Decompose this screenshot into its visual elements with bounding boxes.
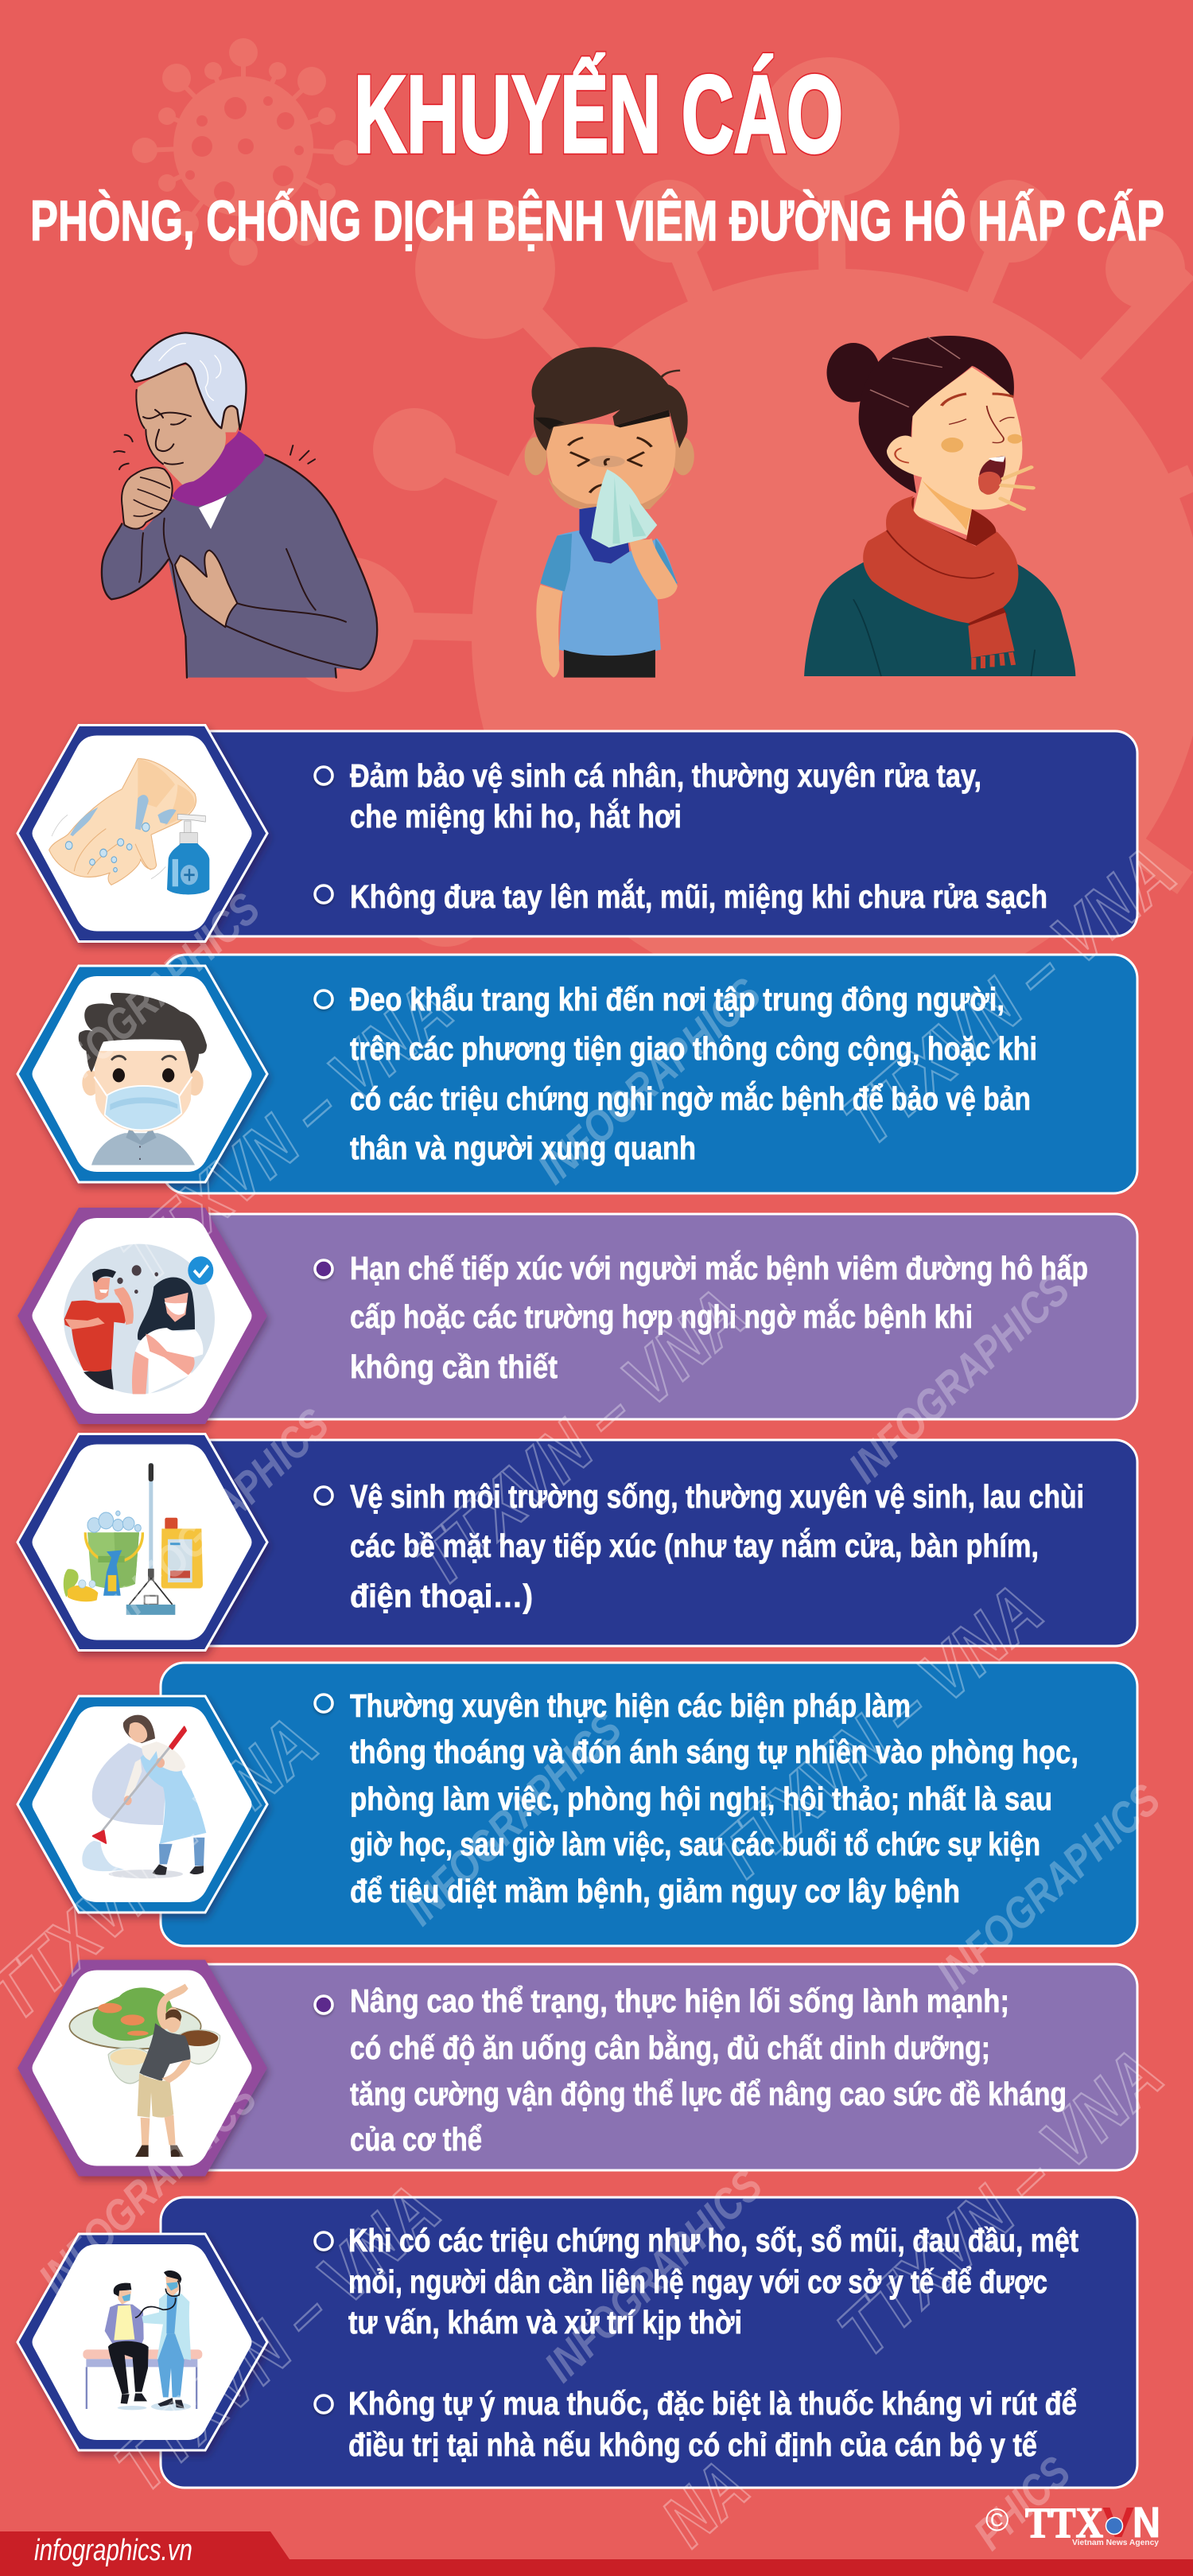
panel 4: cleaning	[17, 1434, 1137, 1650]
text: lifestyle recommendation: Nâng cao thể trạng, thực hiện lối sống lành mạnh;	[350, 1983, 1009, 2019]
bullet	[315, 2232, 332, 2250]
footer website: infographics.vn	[34, 2534, 192, 2567]
text: mask recommendation: Đeo khẩu trang khi đến nơi tập trung đông người,	[350, 981, 1005, 1018]
panel 2 background	[162, 955, 1137, 1193]
panel 2 hexagon	[17, 966, 267, 1182]
watermarks	[0, 831, 1191, 2562]
text: symptoms recommendation: tư vấn, khám và xử trí kịp thời	[348, 2304, 742, 2341]
panel 6 background	[183, 1964, 1137, 2170]
watermarks: TTXVN – VNA	[398, 1273, 761, 1603]
background virus: small	[132, 38, 359, 266]
watermarks: PHICS	[964, 2446, 1080, 2559]
watermarks: INFOGRAPHICS	[839, 1264, 1078, 1492]
bullet	[315, 1260, 332, 1278]
watermarks: TTXVN – VNA	[695, 1569, 1058, 1899]
text: mask recommendation: trên các phương tiện giao thông công cộng, hoặc khi	[350, 1030, 1037, 1067]
panel 1: hygiene	[17, 726, 1137, 942]
text: mask recommendation	[350, 981, 1037, 1166]
logo globe	[1106, 2517, 1123, 2535]
panel 4 hexagon	[17, 1434, 267, 1650]
watermarks: INFOGRAPHICS	[394, 1703, 631, 1935]
watermarks: INFOGRAPHICS	[102, 1399, 338, 1630]
bullet	[315, 990, 332, 1008]
text: cleaning recommendation: các bề mặt hay tiếp xúc (như tay nắm cửa, bàn phím,	[350, 1527, 1039, 1564]
logo tagline: Vietnam News Agency	[1072, 2538, 1159, 2547]
panel 7: seek medical care	[17, 2197, 1137, 2488]
watermarks: TTXVN – VNA	[105, 968, 468, 1298]
text: lifestyle recommendation	[350, 1983, 1067, 2158]
watermarks: INFOGRAPHICS	[535, 2160, 771, 2391]
panel 1 background	[183, 731, 1137, 936]
text: symptoms recommendation	[348, 2222, 1078, 2341]
text: contact recommendation	[350, 1250, 1088, 1385]
illustration: sneezing woman	[804, 336, 1075, 676]
panel 2: face masks	[17, 955, 1137, 1193]
illustration: coughing old man	[102, 333, 377, 678]
panel 7 hexagon	[17, 2234, 267, 2450]
text: cleaning recommendation: điện thoại…)	[350, 1578, 533, 1614]
text: ventilation recommendation	[350, 1687, 1078, 1909]
text: ventilation recommendation: phòng làm việc, phòng hội nghị, hội thảo; nhất là sau	[350, 1780, 1052, 1817]
panel 3 hexagon	[17, 1208, 267, 1424]
text: medication recommendation: điều trị tại nhà nếu không có chỉ định của cán bộ y tế	[348, 2426, 1037, 2463]
text: ventilation recommendation: để tiêu diệt mầm bệnh, giảm nguy cơ lây bệnh	[350, 1873, 960, 1909]
watermarks: INFOGRAPHICS	[29, 2072, 266, 2304]
background virus: large	[280, 57, 1193, 1004]
bullet	[315, 885, 332, 903]
panel 1 hexagon	[17, 726, 267, 942]
logo letter N: N	[1133, 2499, 1160, 2547]
icon: washing hands and sanitizer	[49, 759, 209, 894]
icon: woman mopping	[82, 1715, 206, 1878]
text: first recommendation: Đảm bảo vệ sinh cá nhân, thường xuyên rửa tay,	[350, 757, 981, 794]
text: lifestyle recommendation: có chế độ ăn uống cân bằng, đủ chất dinh dưỡng;	[350, 2029, 990, 2066]
panel 5 hexagon	[17, 1696, 267, 1913]
title	[354, 53, 843, 176]
panel 6: healthy lifestyle	[17, 1960, 1137, 2177]
panel 4 background	[183, 1440, 1137, 1646]
bullet	[315, 2395, 332, 2413]
text: lifestyle recommendation: của cơ thể	[350, 2121, 482, 2158]
footer band	[0, 2531, 1193, 2576]
bullet	[315, 1487, 332, 1504]
text: mask recommendation: có các triệu chứng nghi ngờ mắc bệnh để bảo vệ bản	[350, 1080, 1031, 1117]
text: medication recommendation: Không tự ý mua thuốc, đặc biệt là thuốc kháng vi rút để	[348, 2385, 1077, 2422]
watermarks: INFOGRAPHICS	[29, 883, 269, 1111]
text: cleaning recommendation	[350, 1478, 1084, 1614]
icon: man wearing mask	[79, 993, 207, 1165]
logo letters TTX: TTX	[1025, 2499, 1103, 2547]
icon: food and exercise	[69, 1984, 220, 2157]
text: ventilation recommendation: giờ học, sau giờ làm việc, sau các buổi tổ chức sự kiện	[350, 1826, 1040, 1862]
text: first recommendation: che miệng khi ho, hắt hơi	[350, 798, 682, 835]
text: contact recommendation: không cần thiết	[350, 1348, 558, 1385]
icon: doctor examining patient	[83, 2271, 202, 2411]
icon: people keeping distance	[64, 1244, 215, 1394]
text: mask recommendation: thân và người xung quanh	[350, 1130, 696, 1166]
illustration: boy blowing nose	[525, 347, 694, 678]
text: ventilation recommendation: thông thoáng và đón ánh sáng tự nhiên vào phòng học,	[350, 1734, 1078, 1770]
logo letter V: V	[1102, 2499, 1134, 2547]
panel 7 background	[161, 2197, 1137, 2488]
text: symptoms recommendation: mỏi, người dân cần liên hệ ngay với cơ sở y tế để được	[348, 2263, 1047, 2300]
watermarks: TTXVN – VNA	[100, 2169, 455, 2508]
panel 6 hexagon	[17, 1960, 267, 2177]
title: KHUYẾN CÁO	[354, 53, 843, 176]
title: KHUYẾN CÁO	[354, 53, 843, 176]
panel 5: ventilation	[17, 1663, 1137, 1946]
text: first recommendation	[350, 757, 981, 835]
copyright symbol: ©	[985, 2503, 1008, 2538]
text: second recommendation: Không đưa tay lên mắt, mũi, miệng khi chưa rửa sạch	[350, 878, 1047, 915]
panel 3: limit contact	[17, 1208, 1137, 1424]
TTXVN logo	[985, 2499, 1160, 2547]
text: ventilation recommendation: Thường xuyên thực hiện các biện pháp làm	[350, 1687, 911, 1724]
bullet	[315, 1695, 332, 1712]
icon: cleaning supplies	[64, 1463, 203, 1615]
bullet	[315, 1996, 332, 2014]
watermarks: NA	[647, 2446, 764, 2562]
text: medication recommendation	[348, 2385, 1077, 2463]
text: contact recommendation: cấp hoặc các trường hợp nghi ngờ mắc bệnh khi	[350, 1298, 973, 1335]
panel 3 background	[183, 1214, 1137, 1419]
bullet	[315, 767, 332, 784]
watermarks: INFOGRAPHICS	[528, 968, 770, 1193]
panel 5 background	[161, 1663, 1137, 1946]
